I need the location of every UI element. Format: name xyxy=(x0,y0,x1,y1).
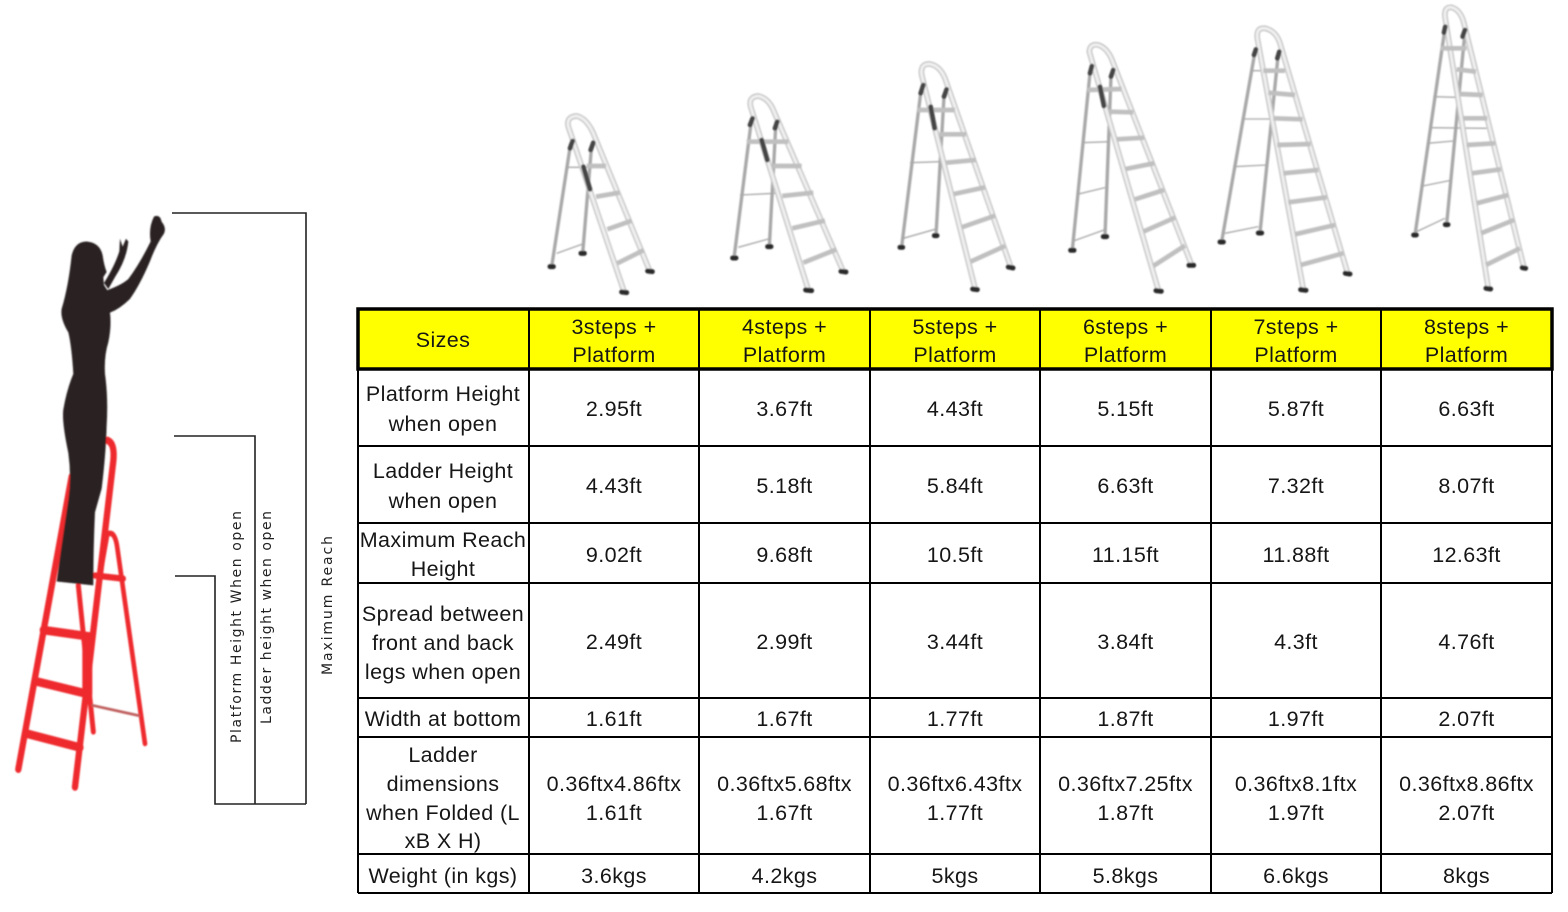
row: ladder height when open xyxy=(373,459,1495,513)
row: folded dimensions: 0.36ftx8.86ftx xyxy=(1399,772,1534,796)
table header row: 5steps + xyxy=(912,315,998,339)
row: folded dimensions: Ladder xyxy=(408,743,478,767)
row: folded dimensions: 2.07ft xyxy=(1438,801,1495,825)
row: width at bottom: 1.67ft xyxy=(756,707,813,731)
row: maximum reach height xyxy=(360,528,1501,581)
row: maximum reach height: Height xyxy=(411,557,475,581)
row: platform height when open: Platform Height xyxy=(366,382,520,406)
row: weight: 3.6kgs xyxy=(581,864,647,888)
row: platform height when open: 3.67ft xyxy=(756,397,813,421)
label: ladder height when open: Ladder height when open xyxy=(259,511,275,724)
table header row xyxy=(358,309,1552,369)
row: platform height when open: 6.63ft xyxy=(1438,397,1495,421)
row: folded dimensions: dimensions xyxy=(387,772,499,796)
table header row: Platform xyxy=(1425,343,1508,367)
row: maximum reach height: 10.5ft xyxy=(927,543,983,567)
row: maximum reach height: 12.63ft xyxy=(1432,543,1501,567)
row: folded dimensions: 1.87ft xyxy=(1097,801,1154,825)
row: spread between legs: legs when open xyxy=(365,660,521,684)
dimension bracket: platform height xyxy=(175,511,306,804)
table header row: 3steps + xyxy=(571,315,657,339)
ladder: 8 steps xyxy=(1414,7,1526,289)
row: maximum reach height: 9.02ft xyxy=(586,543,642,567)
row: platform height when open xyxy=(366,382,1495,436)
row: folded dimensions: 1.67ft xyxy=(756,801,813,825)
row: maximum reach height: 11.88ft xyxy=(1263,543,1329,567)
row: ladder height when open: 8.07ft xyxy=(1438,474,1495,498)
row: ladder height when open: 4.43ft xyxy=(586,474,642,498)
row: width at bottom: 1.87ft xyxy=(1097,707,1154,731)
table header row: 4steps + xyxy=(742,315,827,339)
row: spread between legs: front and back xyxy=(372,631,514,655)
row: platform height when open: when open xyxy=(388,412,497,436)
table header row: Platform xyxy=(913,343,997,367)
row: ladder height when open: Ladder Height xyxy=(373,459,513,483)
row: weight: 4.2kgs xyxy=(752,864,817,888)
spec table xyxy=(358,309,1552,893)
illustration: woman standing on red ladder xyxy=(18,216,165,787)
row: width at bottom xyxy=(365,707,1495,731)
table header row: Sizes xyxy=(416,328,470,352)
row: folded dimensions: when Folded (L xyxy=(365,801,520,825)
row: folded dimensions: 1.61ft xyxy=(586,801,642,825)
row: platform height when open: 5.15ft xyxy=(1097,397,1154,421)
row: spread between legs: 4.76ft xyxy=(1438,630,1495,654)
row: platform height when open: 5.87ft xyxy=(1268,397,1324,421)
row: width at bottom: Width at bottom xyxy=(365,707,521,731)
row: width at bottom: 2.07ft xyxy=(1438,707,1495,731)
row: weight: 6.6kgs xyxy=(1263,864,1329,888)
row: maximum reach height: 11.15ft xyxy=(1092,543,1159,567)
row: folded dimensions: 0.36ftx8.1ftx xyxy=(1235,772,1357,796)
row: ladder height when open: 7.32ft xyxy=(1268,474,1324,498)
row: platform height when open: 2.95ft xyxy=(586,397,642,421)
silhouette xyxy=(57,216,165,585)
row: ladder height when open: 6.63ft xyxy=(1097,474,1154,498)
row: spread between legs: 2.49ft xyxy=(586,630,642,654)
table header row: Platform xyxy=(572,343,656,367)
row: folded dimensions: 1.97ft xyxy=(1268,801,1324,825)
row: folded dimensions: 1.77ft xyxy=(927,801,983,825)
table header row: 7steps + xyxy=(1253,315,1339,339)
label: maximum reach: Maximum Reach xyxy=(320,536,336,675)
row: spread between legs: 2.99ft xyxy=(756,630,813,654)
row: ladder height when open: when open xyxy=(388,489,497,513)
row: weight xyxy=(369,864,1490,888)
row: spread between legs xyxy=(362,602,1495,684)
ladder: 7 steps xyxy=(1220,28,1350,290)
table header row: Platform xyxy=(1254,343,1338,367)
ladder: 6 steps xyxy=(1071,45,1194,291)
ladder: 3 steps xyxy=(550,116,652,293)
table header row: 6steps + xyxy=(1083,315,1168,339)
row: ladder height when open: 5.84ft xyxy=(927,474,983,498)
row: spread between legs: Spread between xyxy=(362,602,524,626)
row: spread between legs: 3.44ft xyxy=(927,630,983,654)
table header row: Platform xyxy=(1084,343,1167,367)
row: weight: 5kgs xyxy=(931,864,979,888)
row: spread between legs: 3.84ft xyxy=(1097,630,1154,654)
red ladder xyxy=(18,440,145,787)
row: folded dimensions: xB X H) xyxy=(405,829,481,853)
table header row: 8steps + xyxy=(1424,315,1509,339)
row: ladder height when open: 5.18ft xyxy=(756,474,813,498)
row: width at bottom: 1.61ft xyxy=(586,707,642,731)
ladder: 5 steps xyxy=(900,64,1013,290)
table header row: Platform xyxy=(743,343,826,367)
row: width at bottom: 1.97ft xyxy=(1268,707,1324,731)
row: platform height when open: 4.43ft xyxy=(927,397,983,421)
dimension bracket: maximum reach xyxy=(172,213,336,804)
table grid xyxy=(358,309,1552,893)
row: folded dimensions xyxy=(365,743,1534,853)
row: folded dimensions: 0.36ftx5.68ftx xyxy=(717,772,852,796)
row: folded dimensions: 0.36ftx7.25ftx xyxy=(1058,772,1193,796)
row: maximum reach height: 9.68ft xyxy=(756,543,813,567)
row: folded dimensions: 0.36ftx4.86ftx xyxy=(547,772,681,796)
row: folded dimensions: 0.36ftx6.43ftx xyxy=(888,772,1022,796)
row: weight: 5.8kgs xyxy=(1093,864,1158,888)
row: maximum reach height: Maximum Reach xyxy=(360,528,526,552)
ladder: 4 steps xyxy=(733,96,846,291)
label: platform height when open: Platform Height When open xyxy=(229,511,245,743)
row: width at bottom: 1.77ft xyxy=(927,707,983,731)
row: spread between legs: 4.3ft xyxy=(1274,630,1318,654)
dimension bracket: ladder height xyxy=(174,436,275,804)
row: weight: Weight (in kgs) xyxy=(369,864,517,888)
row: weight: 8kgs xyxy=(1443,864,1490,888)
